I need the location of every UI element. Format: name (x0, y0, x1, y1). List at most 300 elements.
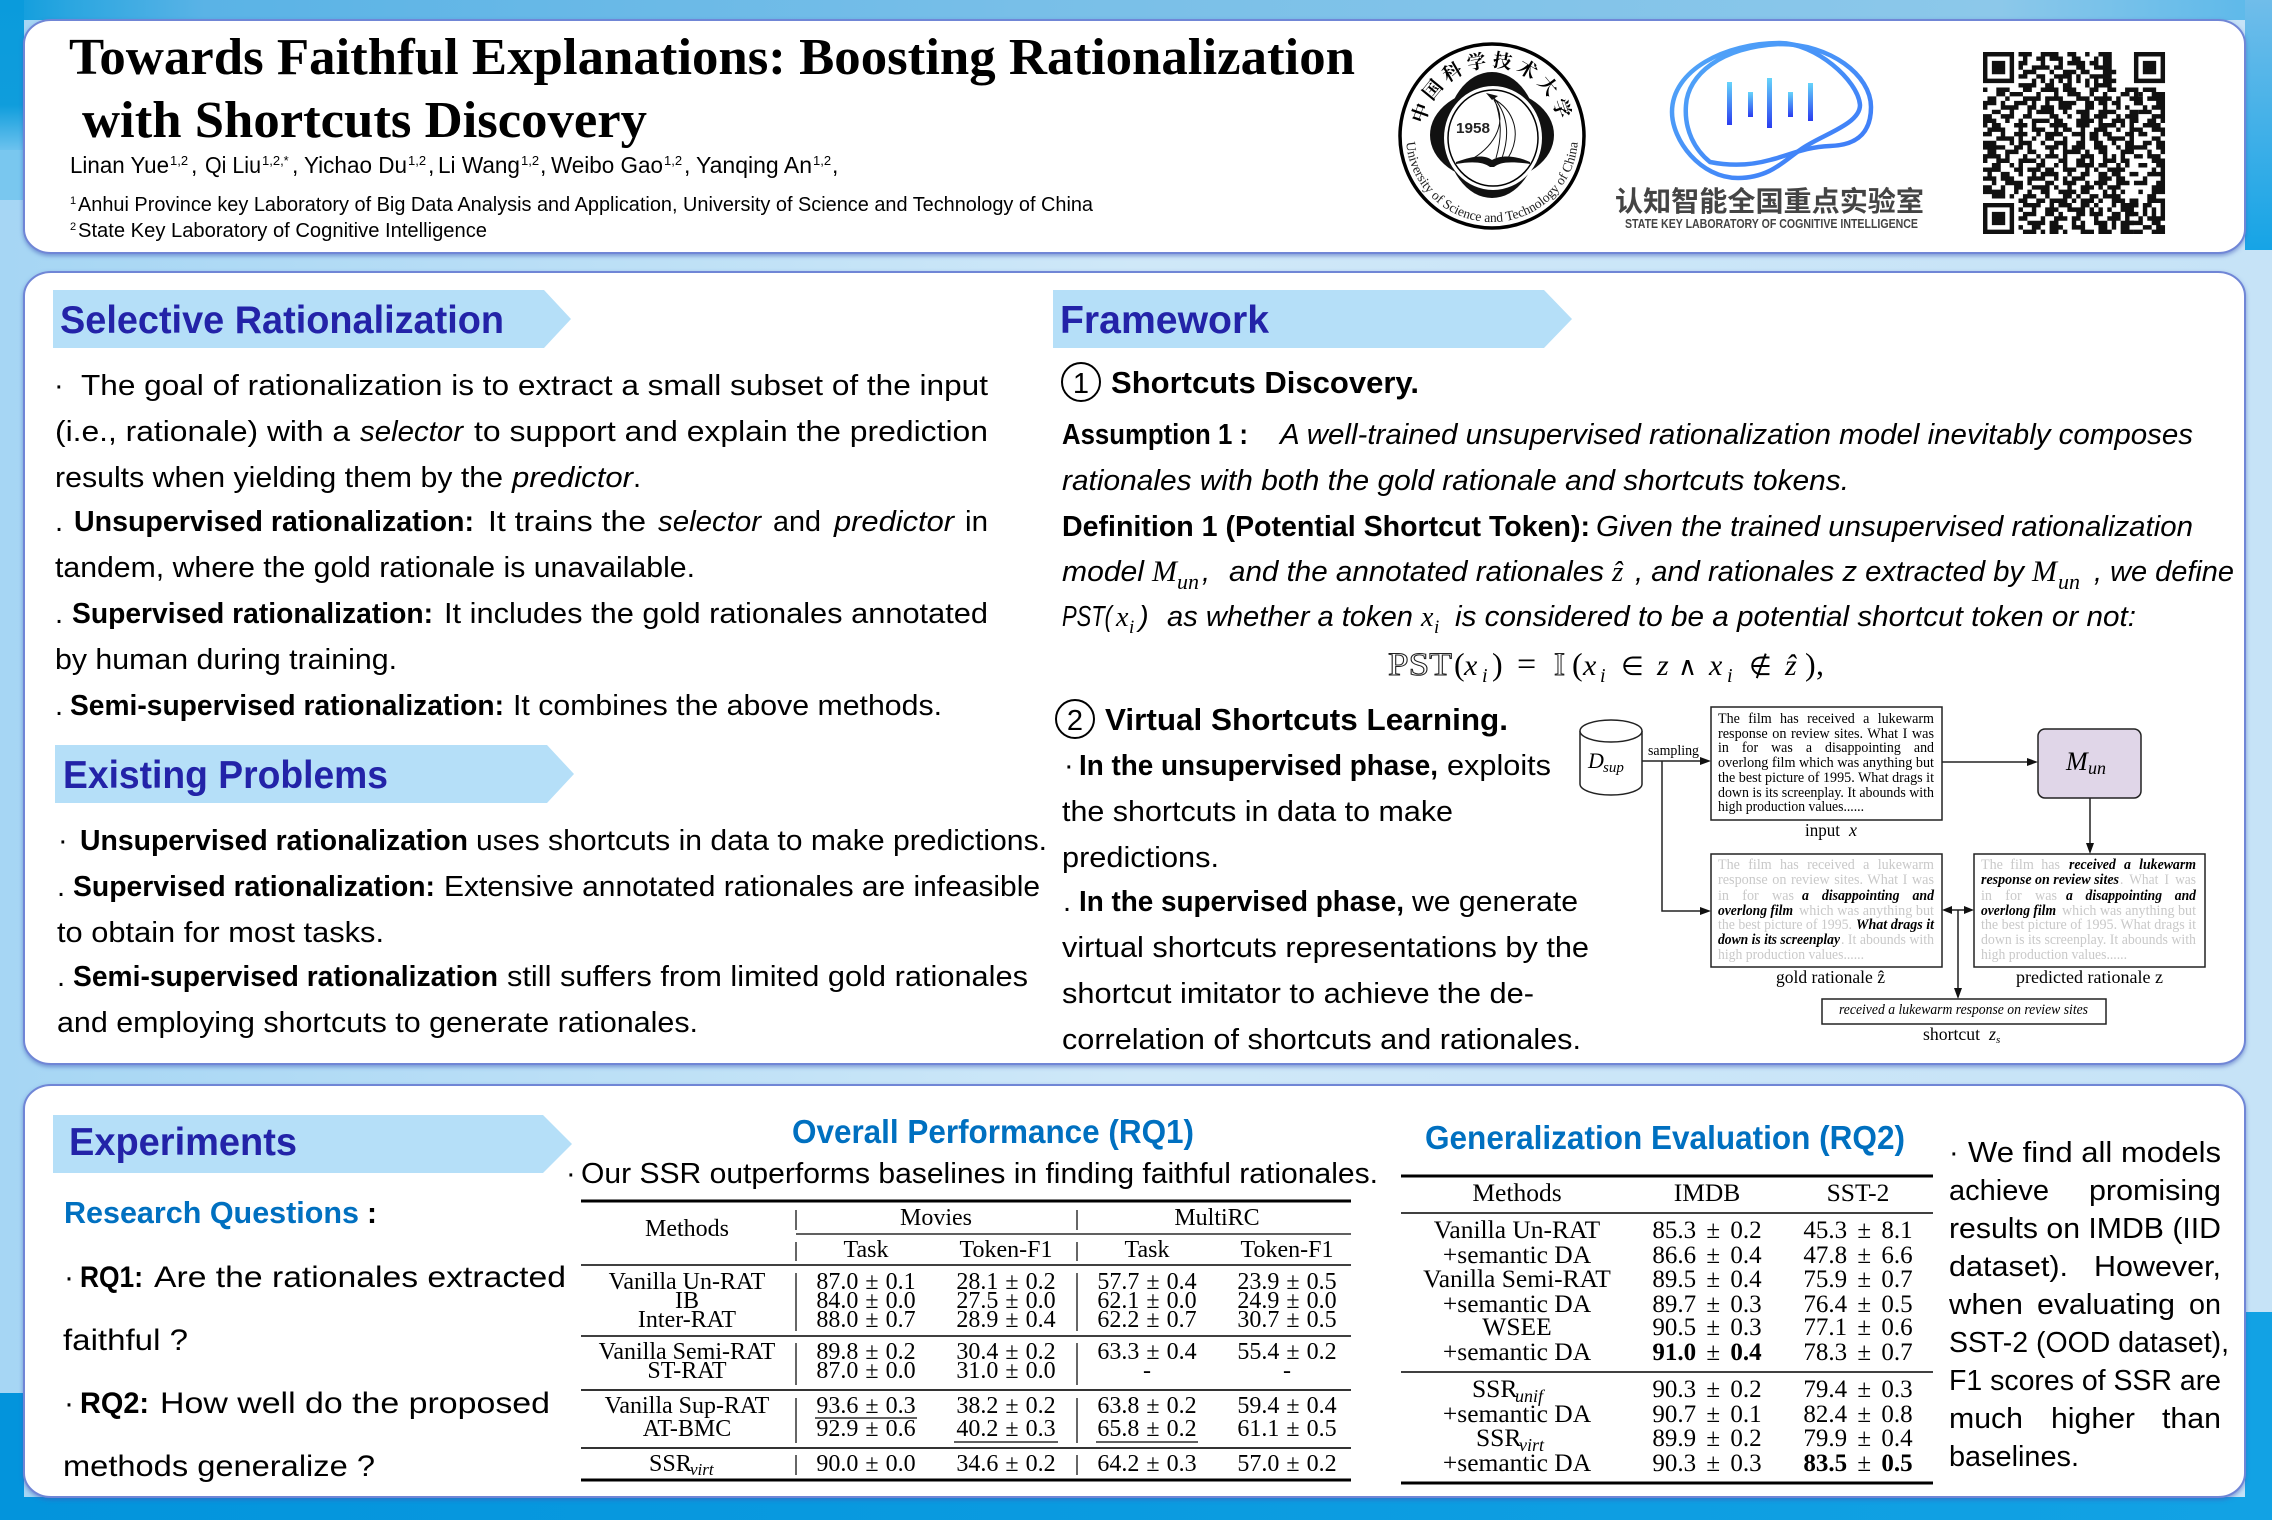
table: generalization evaluation: +semantic DA (1443, 1448, 1592, 1477)
text block: assumption and definition: Assumption 1 : (1062, 419, 1248, 451)
text block: generalization finding: F1 scores of SSR are (1949, 1365, 2221, 1397)
table: generalization evaluation: 91.0 ± 0.4 (1652, 1339, 1762, 1366)
label: shortcut: shortcut (1923, 1024, 1980, 1044)
table: generalization evaluation: 90.3 ± 0.3 (1652, 1450, 1762, 1477)
formula: potential shortcut token: i (1482, 665, 1488, 687)
box: predicted rationale: overlong film (1981, 903, 2056, 919)
box: input: the best picture of 1995. What drags it (1718, 770, 1934, 786)
box: gold rationale: response on review sites. What I was (1718, 872, 1934, 888)
authors: Yanqing An (696, 152, 812, 178)
icon: USTC seal: University of Science and Technology of China (1406, 141, 1578, 222)
text block: existing problems: Supervised rationalization: (73, 871, 435, 903)
authors: 1,2 (521, 153, 539, 168)
table: overall performance: 59.4 ± 0.4 (1237, 1393, 1337, 1419)
text block: virtual shortcuts learning: correlation of shortcuts and rationales. (1062, 1024, 1581, 1056)
text block: selective rationalization: It includes the gold rationales annotated (444, 598, 988, 630)
text block: selective rationalization (54, 370, 988, 722)
title: with Shortcuts Discovery (82, 92, 647, 149)
table: generalization evaluation: 85.3 ± 0.2 (1652, 1217, 1762, 1244)
table: generalization evaluation: 75.9 ± 0.7 (1803, 1266, 1913, 1293)
table: overall performance: 40.2 ± 0.3 (956, 1416, 1056, 1442)
table: overall performance: 93.6 ± 0.3 (816, 1393, 916, 1419)
table: overall performance: 38.2 ± 0.2 (956, 1393, 1056, 1419)
authors: Qi Liu (205, 152, 261, 178)
text block: existing problems: · (58, 825, 68, 857)
table: generalization evaluation: 76.4 ± 0.5 (1803, 1291, 1913, 1318)
table: overall performance (581, 1201, 1351, 1480)
text block: existing problems: uses shortcuts in data to make predictions. (476, 825, 1047, 857)
table: overall performance: ST-RAT (647, 1358, 727, 1384)
table: generalization evaluation: 79.9 ± 0.4 (1803, 1425, 1913, 1452)
text block: research questions: methods generalize ? (63, 1450, 375, 1483)
table: overall performance: Token-F1 (1241, 1237, 1333, 1263)
table: generalization evaluation (1401, 1176, 1933, 1483)
authors: , (191, 152, 197, 178)
text block: virtual shortcuts learning: exploits (1447, 750, 1551, 782)
table: generalization evaluation: virt (1519, 1435, 1545, 1455)
table: overall performance: 90.0 ± 0.0 (816, 1451, 916, 1477)
table: overall performance: - (1143, 1358, 1151, 1384)
table: generalization evaluation: +semantic DA (1443, 1289, 1592, 1318)
formula: potential shortcut token: PST (1388, 647, 1452, 683)
text block: generalization finding: dataset). (1949, 1251, 2068, 1283)
formula: potential shortcut token: = (1517, 646, 1536, 683)
table: generalization evaluation: 90.7 ± 0.1 (1652, 1401, 1762, 1428)
formula: potential shortcut token: ) (1805, 646, 1816, 682)
table: overall performance: 55.4 ± 0.2 (1237, 1339, 1337, 1365)
heading: Existing Problems (55, 745, 574, 803)
table: overall performance: Token-F1 (960, 1237, 1052, 1263)
box: input: down is its screenplay. It abounds with (1718, 785, 1935, 801)
table: overall performance: 63.8 ± 0.2 (1097, 1393, 1197, 1419)
text block: assumption and definition: as whether a token (1167, 601, 1413, 633)
text block: generalization finding: when (1948, 1289, 2023, 1321)
table: overall performance: SSR (649, 1451, 692, 1477)
icon: USTC seal: 1958 (1456, 120, 1490, 137)
table: overall performance: Vanilla Sup-RAT (605, 1393, 770, 1419)
text block: existing problems: Unsupervised rationalization (80, 825, 468, 857)
table: generalization evaluation: WSEE (1482, 1312, 1552, 1341)
text block: virtual shortcuts learning: the shortcuts in data to make (1062, 796, 1453, 828)
table: overall performance: 28.1 ± 0.2 (956, 1269, 1056, 1295)
box: predicted rationale: The film has (1981, 857, 2060, 873)
text block: selective rationalization: . (55, 506, 63, 538)
text block: selective rationalization: in (965, 506, 988, 538)
table: overall performance: 87.0 ± 0.1 (816, 1269, 916, 1295)
table: generalization evaluation: 77.1 ± 0.6 (1803, 1314, 1913, 1341)
text block: virtual shortcuts learning: predictions. (1062, 842, 1219, 874)
text block: existing problems: and employing shortcuts to generate rationales. (57, 1007, 698, 1039)
text block: assumption and definition: x (1115, 602, 1129, 633)
text block: existing problems: Semi-supervised rationalization (73, 961, 498, 993)
text block: selective rationalization: . (55, 598, 63, 630)
table: overall performance: Task (1125, 1237, 1169, 1263)
box: input: in for was a disappointing and (1718, 740, 1935, 756)
authors: , (428, 152, 434, 178)
table: generalization evaluation: 89.7 ± 0.3 (1652, 1291, 1762, 1318)
text block: existing problems (57, 825, 1047, 1039)
title (69, 29, 1355, 149)
text block: assumption and definition: Definition 1 (Potential Shortcut Token): (1062, 511, 1590, 543)
table: generalization evaluation: +semantic DA (1443, 1337, 1592, 1366)
text block: assumption and definition: , (1202, 556, 1210, 588)
label: shortcut (1923, 1024, 2000, 1046)
icon: USTC seal: 中国科学技术大学 (1411, 50, 1572, 122)
heading: Framework: Framework (1060, 299, 1269, 342)
box: shortcut: received a lukewarm response on review sites (1839, 1002, 2088, 1018)
text block: assumption and definition: PST( (1062, 601, 1115, 633)
text block: selective rationalization: . (55, 690, 63, 722)
heading: Selective Rationalization (53, 290, 571, 348)
text block: generalization finding: baselines. (1949, 1441, 2079, 1473)
box: gold rationale (1711, 854, 1942, 967)
text block: research questions: Research Questions (64, 1195, 359, 1230)
panel: experiments (24, 1085, 2245, 1497)
box: predicted rationale: response on review sites (1981, 872, 2119, 888)
table: generalization evaluation: 45.3 ± 8.1 (1803, 1217, 1913, 1244)
table: generalization evaluation: unif (1515, 1386, 1546, 1406)
formula: potential shortcut token: x (1708, 649, 1723, 682)
box: gold rationale: the best picture of 1995. (1718, 917, 1852, 933)
text block: research questions: RQ1: (80, 1261, 143, 1294)
table: overall performance: 62.1 ± 0.0 (1097, 1288, 1197, 1314)
label: gold rationale: gold rationale ẑ (1776, 967, 1885, 987)
authors: 1,2 (170, 153, 188, 168)
table: generalization evaluation: Vanilla Semi-RAT (1423, 1264, 1611, 1293)
icon: QR code (1983, 52, 2165, 234)
authors: , (292, 152, 298, 178)
label: predicted rationale: predicted rationale z (2016, 967, 2163, 987)
text block: assumption and definition: and the annotated rationales (1229, 556, 1604, 588)
table: generalization evaluation: 90.5 ± 0.3 (1652, 1314, 1762, 1341)
box: predicted rationale: a disappointing and (2066, 888, 2197, 904)
heading: Generalization Evaluation: Generalization Evaluation (RQ2) (1425, 1119, 1905, 1156)
box: predicted rationale: received a lukewarm (2069, 857, 2196, 873)
text block: existing problems: Extensive annotated rationales are infeasible (444, 871, 1040, 903)
text block: assumption and definition: M (1151, 555, 1179, 588)
text block: assumption and definition: , we define (2094, 556, 2234, 588)
box: predicted rationale: which was anything but (2062, 903, 2196, 919)
authors: , (684, 152, 690, 178)
icon: USTC seal (1398, 42, 1586, 230)
text block: virtual shortcuts learning (1062, 750, 1589, 1056)
table: overall performance: MultiRC (1174, 1205, 1260, 1231)
text block: virtual shortcuts learning: In the unsupervised phase, (1079, 750, 1438, 782)
subheading: Shortcuts Discovery: Shortcuts Discovery. (1111, 365, 1419, 400)
formula: potential shortcut token: ( (1572, 646, 1583, 682)
icon: dataset cylinder: D (1587, 748, 1604, 773)
text block: selective rationalization: (i.e., rationale) with a (55, 416, 351, 448)
table: overall performance: AT-BMC (643, 1416, 731, 1442)
text block: virtual shortcuts learning: virtual shortcuts representations by the (1062, 932, 1589, 964)
subheading: Virtual Shortcuts Learning: Virtual Shortcuts Learning. (1105, 702, 1508, 737)
box: model M_un: un (2088, 758, 2106, 778)
text block: generalization finding: promising (2089, 1175, 2221, 1207)
table: generalization evaluation: 86.6 ± 0.4 (1652, 1242, 1762, 1269)
text block: selective rationalization: It trains the (488, 506, 646, 538)
text block: generalization finding: evaluating (2037, 1289, 2175, 1321)
table: overall performance: 23.9 ± 0.5 (1237, 1269, 1337, 1295)
affiliations (70, 194, 1094, 242)
box: gold rationale: . It abounds with (1841, 932, 1935, 948)
text block: generalization finding: However, (2094, 1251, 2221, 1283)
framework diagram: sampling (1648, 743, 1699, 759)
subheading: Virtual Shortcuts Learning: 2 (1067, 705, 1083, 737)
formula: potential shortcut token: ∈ (1621, 652, 1644, 682)
box: model M_un: M (2065, 747, 2089, 776)
text block: assumption and definition: M (2031, 555, 2059, 588)
box: predicted rationale: the best picture of 1995. What drags it (1981, 917, 2196, 933)
heading: Framework (1053, 290, 1572, 348)
table: overall performance: - (1283, 1358, 1291, 1384)
table: overall performance: 65.8 ± 0.2 (1097, 1416, 1197, 1442)
text block: selective rationalization: by human during training. (55, 644, 397, 676)
table: generalization evaluation: Methods (1472, 1178, 1562, 1207)
table: generalization evaluation: SSR (1472, 1374, 1517, 1403)
box: shortcut (1822, 999, 2106, 1024)
formula: potential shortcut token: ∧ (1678, 652, 1697, 682)
text block: research questions: · (64, 1387, 74, 1420)
authors: 1,2 (408, 153, 426, 168)
table: overall performance: 63.3 ± 0.4 (1097, 1339, 1197, 1365)
text block: virtual shortcuts learning: shortcut imitator to achieve the de- (1062, 978, 1534, 1010)
label: variable x: x (1848, 820, 1857, 840)
table: overall performance: Vanilla Semi-RAT (599, 1339, 776, 1365)
affiliations: 1 (70, 195, 76, 207)
text block: research questions: How well do the proposed (160, 1387, 550, 1420)
text block: research questions: RQ2: (80, 1387, 149, 1420)
formula: potential shortcut token: i (1600, 665, 1606, 687)
table: generalization evaluation: 83.5 ± 0.5 (1803, 1450, 1913, 1477)
formula: potential shortcut token: I (1554, 647, 1565, 683)
table: overall performance: Movies (900, 1205, 972, 1231)
text block: assumption and definition: , and rationales z extracted by (1635, 556, 2026, 588)
box: gold rationale: overlong film (1718, 903, 1793, 919)
text block: selective rationalization: selector (658, 506, 762, 538)
heading: Experiments: Experiments (69, 1121, 297, 1164)
framework diagram (1580, 707, 2205, 1046)
authors: Yichao Du (304, 152, 407, 178)
text block: selective rationalization: and (773, 506, 821, 538)
text block: assumption and definition: model (1062, 556, 1146, 588)
formula: potential shortcut token: ẑ (1784, 649, 1797, 682)
text block: generalization finding (1948, 1137, 2229, 1473)
table: generalization evaluation: +semantic DA (1443, 1240, 1592, 1269)
table: generalization evaluation: 47.8 ± 6.6 (1803, 1242, 1913, 1269)
text block: assumption and definition: un (2058, 569, 2080, 594)
text block: selective rationalization: The goal of rationalization is to extract a small subset of the input (81, 370, 988, 402)
formula: potential shortcut token: z (1656, 649, 1669, 682)
box: input (1711, 707, 1942, 820)
text block: selective rationalization: tandem, where the gold rationale is unavailable. (55, 552, 695, 584)
table: overall performance: IB (675, 1288, 699, 1314)
table: overall performance: Methods (645, 1216, 729, 1242)
icon: dataset cylinder: sup (1603, 760, 1624, 776)
text block: existing problems: to obtain for most tasks. (57, 917, 384, 949)
text block: generalization finding: results on IMDB (IID (1949, 1213, 2221, 1245)
text block: selective rationalization: Unsupervised rationalization: (74, 506, 474, 538)
formula: potential shortcut token: ( (1454, 646, 1465, 682)
table: overall performance: 30.7 ± 0.5 (1237, 1307, 1337, 1333)
table: overall performance: 62.2 ± 0.7 (1097, 1307, 1197, 1333)
table: overall performance: virt (690, 1460, 715, 1479)
text block: existing problems: still suffers from limited gold rationales (507, 961, 1028, 993)
text block: generalization finding: than (2162, 1403, 2221, 1435)
box: gold rationale: a disappointing and (1802, 888, 1935, 904)
formula: potential shortcut token: ) (1492, 646, 1503, 682)
heading: Overall Performance: Overall Performance (RQ1) (792, 1113, 1194, 1150)
formula: potential shortcut token (1388, 646, 1824, 687)
text block: selective rationalization: Semi-supervised rationalization: (70, 690, 504, 722)
box: gold rationale: down is its screenplay (1718, 932, 1840, 948)
title: Towards Faithful Explanations: Boosting Rationalization (69, 29, 1355, 86)
table: overall performance: 31.0 ± 0.0 (956, 1358, 1056, 1384)
formula: potential shortcut token: i (1727, 665, 1733, 687)
affiliations: State Key Laboratory of Cognitive Intelligence (78, 220, 487, 242)
text block: selective rationalization: results when yielding them by the (55, 462, 503, 494)
label: shortcut: s (1996, 1034, 2000, 1046)
table: overall performance: 64.2 ± 0.3 (1097, 1451, 1197, 1477)
authors: , (540, 152, 546, 178)
text block: assumption and definition: is considered to be a potential shortcut token or not: (1455, 601, 2136, 633)
panel: framing (24, 272, 2245, 1064)
text block: virtual shortcuts learning: we generate (1411, 886, 1578, 918)
icon: dataset cylinder (1580, 720, 1642, 795)
table: overall performance: Inter-RAT (638, 1307, 736, 1333)
authors: , (832, 152, 838, 178)
table: generalization evaluation: +semantic DA (1443, 1399, 1592, 1428)
formula: potential shortcut token: , (1816, 646, 1824, 682)
authors (70, 152, 838, 178)
text block: selective rationalization: Supervised rationalization: (72, 598, 433, 630)
text block: assumption and definition: rationales with both the gold rationale and shortcuts tokens. (1062, 465, 1849, 497)
box: predicted rationale: . What I was (2120, 872, 2196, 888)
icon: cognitive intelligence lab logo (1615, 43, 1924, 231)
text block: virtual shortcuts learning: . (1063, 886, 1071, 918)
icon: cognitive intelligence lab logo: 认知智能全国重点实验室 (1615, 186, 1924, 217)
text: overall finding: · (566, 1158, 576, 1190)
box: input: response on review sites. What I was (1718, 726, 1934, 742)
formula: potential shortcut token: ∉ (1749, 652, 1772, 682)
text block: existing problems: . (57, 961, 65, 993)
table: generalization evaluation: Vanilla Un-RAT (1434, 1215, 1601, 1244)
table: generalization evaluation: 89.9 ± 0.2 (1652, 1425, 1762, 1452)
label: shortcut: z (1988, 1024, 1996, 1044)
box: predicted rationale (1974, 854, 2205, 967)
box: predicted rationale: in for was (1981, 888, 2057, 904)
text block: selective rationalization: selector (360, 416, 464, 448)
table: overall performance: 30.4 ± 0.2 (956, 1339, 1056, 1365)
formula: potential shortcut token: x (1582, 649, 1597, 682)
table: overall performance: Task (844, 1237, 888, 1263)
text block: selective rationalization: predictor (511, 462, 634, 494)
box: gold rationale: What drags it (1856, 917, 1935, 933)
text block: selective rationalization: . (633, 462, 641, 494)
text block: assumption and definition: un (1177, 569, 1199, 594)
text block: virtual shortcuts learning: · (1064, 750, 1074, 782)
table: generalization evaluation: SST-2 (1827, 1178, 1889, 1207)
subheading: Shortcuts Discovery: 1 (1073, 368, 1089, 400)
text block: research questions: faithful ? (63, 1324, 188, 1357)
heading: Existing Problems: Existing Problems (63, 754, 388, 797)
text block: generalization finding: SST-2 (OOD dataset), (1949, 1327, 2229, 1359)
heading: Selective Rationalization: Selective Rationalization (60, 299, 504, 342)
authors: Linan Yue (70, 152, 169, 178)
table: overall performance: 87.0 ± 0.0 (816, 1358, 916, 1384)
text block: research questions (63, 1195, 566, 1483)
text block: assumption and definition: x (1420, 602, 1434, 633)
table: overall performance: 28.9 ± 0.4 (956, 1307, 1056, 1333)
box: predicted rationale: down is its screenplay. It abounds with (1981, 932, 2197, 948)
text block: assumption and definition: i (1434, 617, 1439, 638)
box: gold rationale: The film has received a lukewarm (1718, 857, 1935, 873)
arrows (1642, 757, 2094, 999)
text block: research questions: : (367, 1197, 377, 1230)
table: generalization evaluation: 78.3 ± 0.7 (1803, 1339, 1913, 1366)
box: input: overlong film which was anything but (1718, 755, 1934, 771)
table: overall performance: 92.9 ± 0.6 (816, 1416, 916, 1442)
table: overall performance: 84.0 ± 0.0 (816, 1288, 916, 1314)
text: overall finding: Our SSR outperforms baselines in finding faithful rationales. (581, 1158, 1378, 1190)
panel: header (20, 18, 2248, 259)
text block: virtual shortcuts learning: In the supervised phase, (1079, 886, 1404, 918)
box: predicted rationale: high production values...... (1981, 947, 2127, 963)
affiliations: 2 (70, 221, 76, 233)
table: generalization evaluation: 89.5 ± 0.4 (1652, 1266, 1762, 1293)
text block: existing problems: . (57, 871, 65, 903)
table: generalization evaluation: SSR (1476, 1423, 1521, 1452)
table: overall performance: 27.5 ± 0.0 (956, 1288, 1056, 1314)
authors: Li Wang (438, 152, 520, 178)
text block: generalization finding: higher (2051, 1403, 2135, 1435)
heading: Experiments (53, 1115, 572, 1173)
text block: generalization finding: achieve (1949, 1175, 2049, 1207)
text block: assumption and definition: A well-trained unsupervised rationalization model inevitably composes (1278, 419, 2193, 451)
affiliations: Anhui Province key Laboratory of Big Data Analysis and Application, University of Science and Technology of China (78, 194, 1094, 216)
table: overall performance: 34.6 ± 0.2 (956, 1451, 1056, 1477)
box: input: The film has received a lukewarm (1718, 711, 1935, 727)
formula: potential shortcut token: x (1463, 649, 1478, 682)
text block: selective rationalization: to support and explain the prediction (474, 416, 988, 448)
authors: Weibo Gao (551, 152, 663, 178)
box: input: high production values...... (1718, 799, 1864, 815)
text block: assumption and definition: ) (1136, 601, 1149, 633)
text block: generalization finding: · (1949, 1137, 1959, 1169)
table: overall performance: 61.1 ± 0.5 (1237, 1416, 1337, 1442)
table: generalization evaluation: 90.3 ± 0.2 (1652, 1376, 1762, 1403)
text block: research questions: Are the rationales extracted (154, 1261, 566, 1294)
text block: assumption and definition: Given the trained unsupervised rationalization (1596, 511, 2193, 543)
text block: generalization finding: We find all models (1968, 1137, 2221, 1169)
text block: assumption and definition (1062, 419, 2234, 638)
table: overall performance: 57.7 ± 0.4 (1097, 1269, 1197, 1295)
box: gold rationale: high production values...... (1718, 947, 1864, 963)
text block: research questions: · (64, 1261, 74, 1294)
table: overall performance: 89.8 ± 0.2 (816, 1339, 916, 1365)
text block: generalization finding: on (2189, 1289, 2221, 1321)
table: overall performance: 57.0 ± 0.2 (1237, 1451, 1337, 1477)
icon: cognitive intelligence lab logo: STATE KEY LABORATORY OF COGNITIVE INTELLIGENCE (1625, 217, 1918, 231)
text block: selective rationalization: predictor (833, 506, 955, 538)
table: generalization evaluation: IMDB (1674, 1178, 1740, 1207)
authors: 1,2 (664, 153, 682, 168)
text block: assumption and definition: i (1129, 617, 1134, 638)
box: gold rationale: in for was (1718, 888, 1794, 904)
box: gold rationale: which was anything but (1799, 903, 1934, 919)
table: overall performance: Vanilla Un-RAT (609, 1269, 766, 1295)
authors: 1,2,* (262, 153, 289, 168)
table: overall performance: 88.0 ± 0.7 (816, 1307, 916, 1333)
